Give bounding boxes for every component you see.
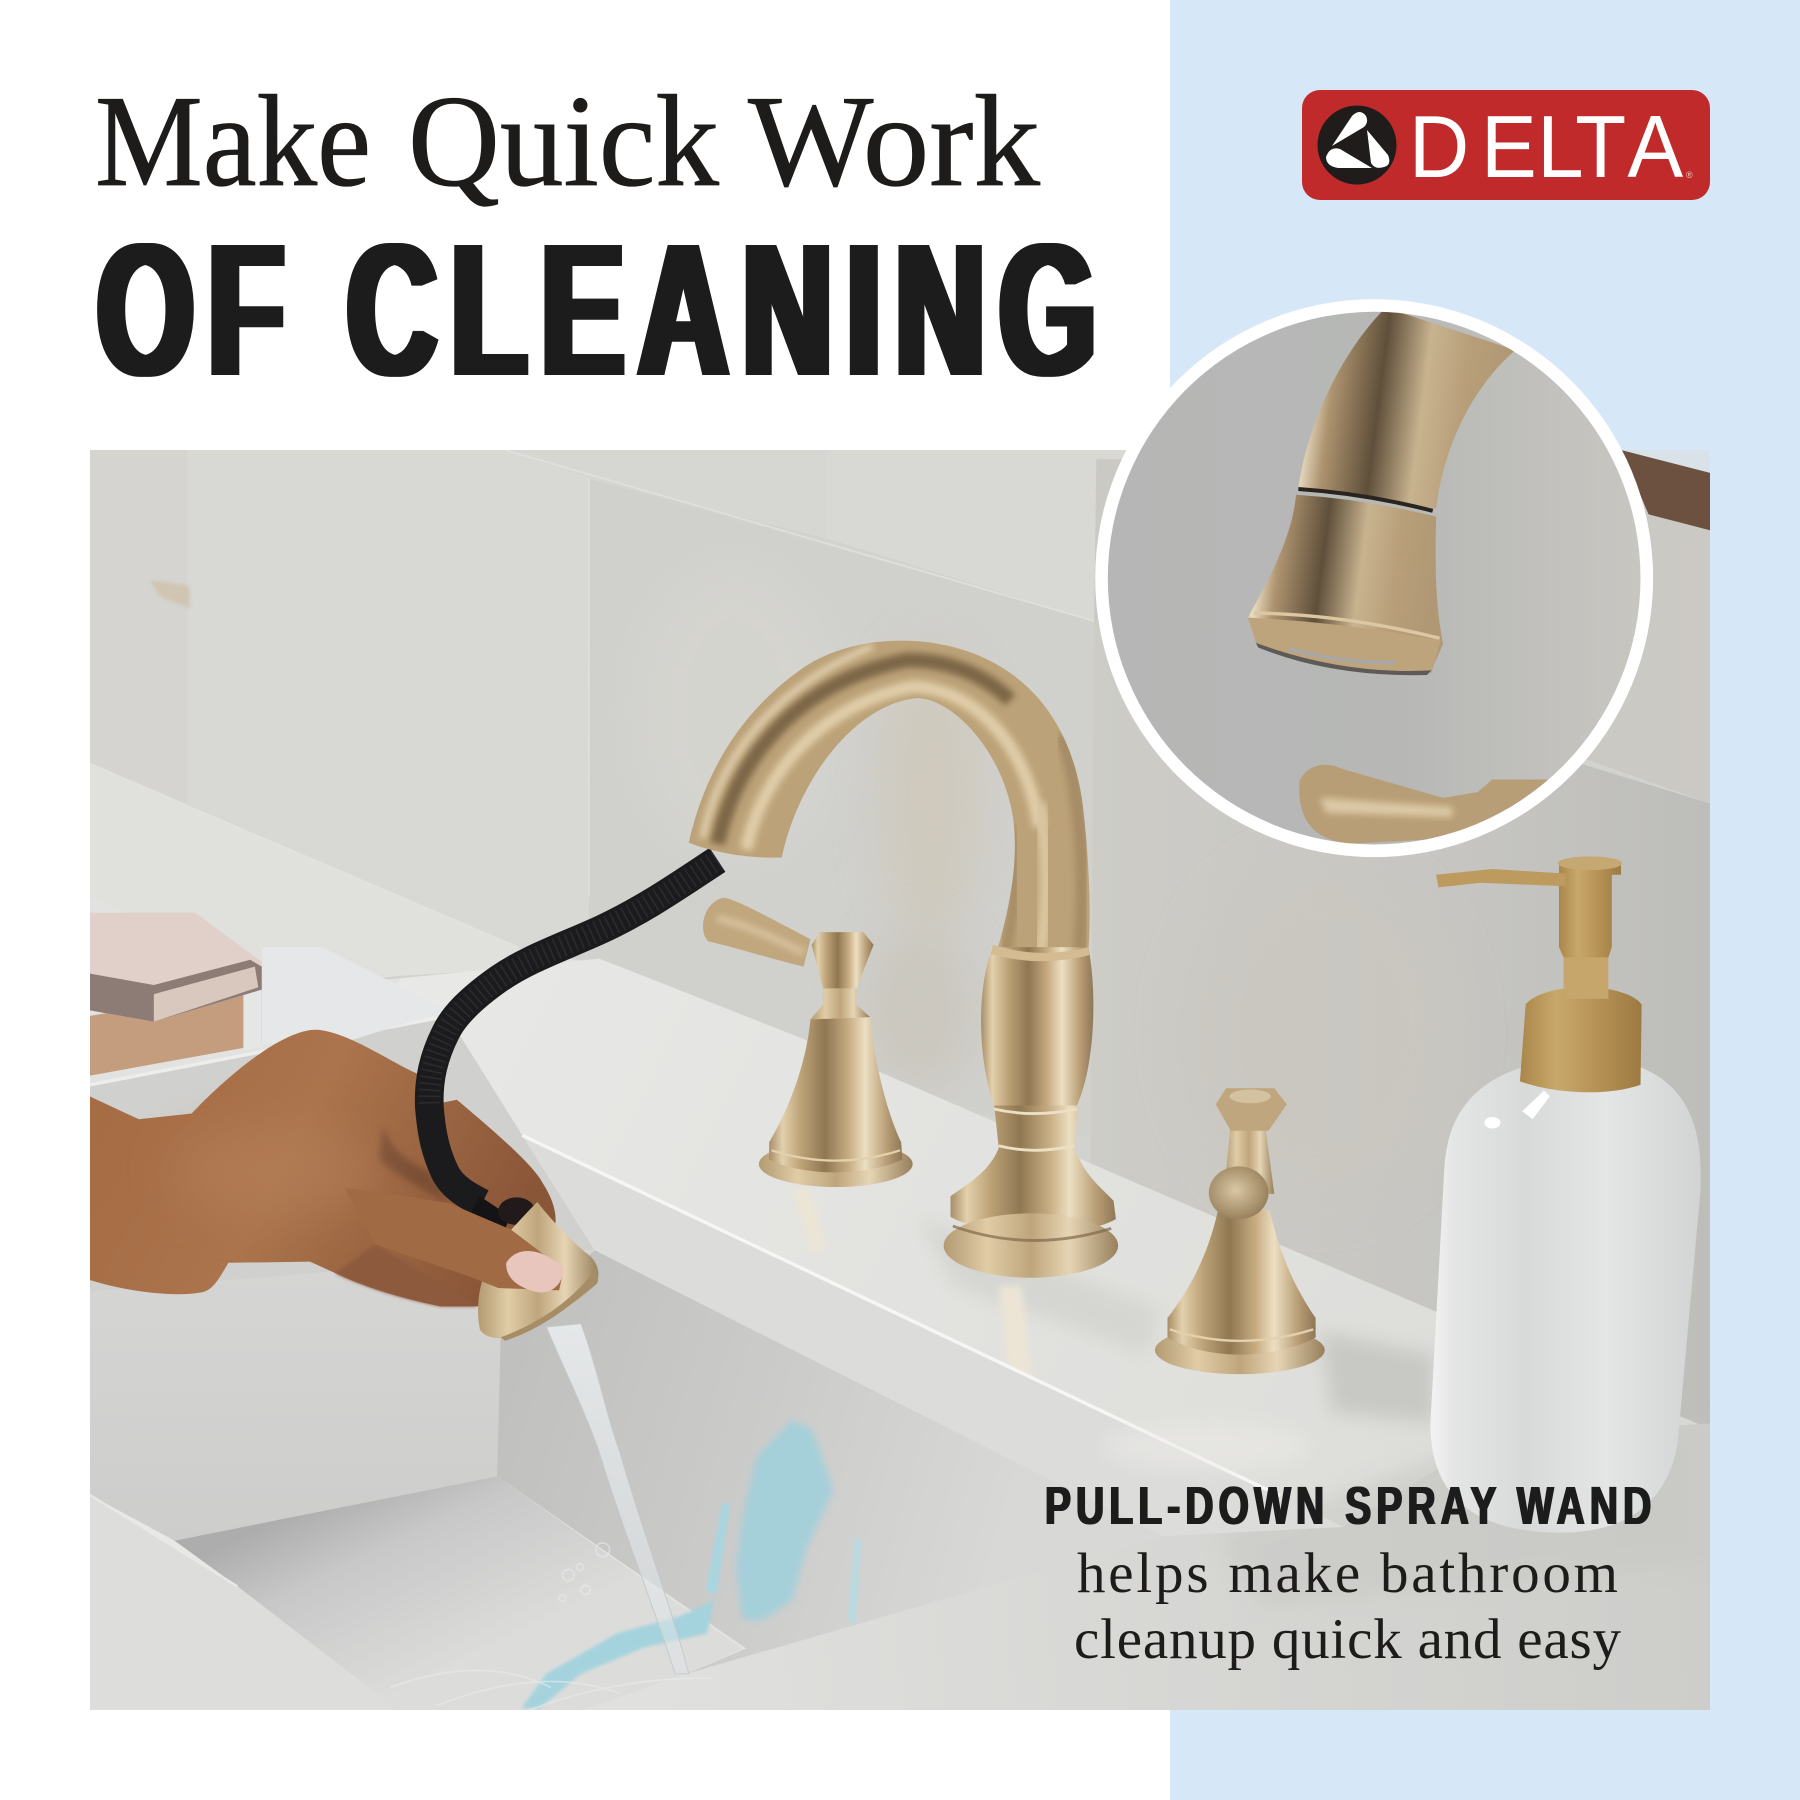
inset aerator [1256,643,1432,675]
callout line two: cleanup quick and easy [1074,1608,1622,1671]
bottle highlights [1484,1091,1550,1128]
faucet base [951,1106,1116,1234]
mirror edge [1621,450,1711,530]
title line: bold condensed: OF CLEANING [97,204,1096,415]
left handle [703,898,913,1187]
hose [429,860,718,1238]
sink back wall [90,1272,500,1540]
main faucet [689,641,1118,1278]
hand [90,1030,574,1309]
sink floor [174,1476,635,1710]
title line: serif [95,69,1041,214]
panel: bathroom photo scene [90,450,1711,1711]
marble tiles [90,450,1711,1429]
logo emblem [1318,106,1396,184]
spout [689,641,1090,959]
pump collar [1520,987,1642,1092]
soft shadows on counter [792,1188,1711,1607]
cleanser smear in sink [521,1420,861,1708]
water stream [546,1324,689,1674]
soap dispenser [1430,856,1701,1533]
title: make quick work of cleaning [95,69,1096,415]
inset ring [1298,489,1433,511]
sink basin [90,1016,1343,1711]
inset circle: spout closeup [1095,299,1653,857]
pump spout [1436,869,1566,887]
makeup jar [90,913,448,1076]
wall base [90,450,1710,1164]
bottle [1430,1068,1701,1533]
title line: serif: Quick [408,69,719,214]
inset spray head [1248,495,1443,673]
faucet neck rings [994,1109,1077,1150]
pump stem [1564,953,1608,999]
countertop [90,959,1711,1711]
white background [0,0,1170,1800]
faucet collar [991,945,1089,961]
inset white border [1095,299,1653,857]
logo: delta [1302,90,1710,200]
callout line one: helps make bathroom [1077,1542,1618,1605]
faucet foot [944,1213,1118,1278]
registered mark: ® [1686,170,1693,180]
panel reflection on countertop [1102,1421,1309,1472]
right handle [1155,1088,1325,1374]
counter right lower surface [1120,1424,1710,1710]
basin upper wall [352,1020,594,1251]
thumb and nail [344,1188,564,1293]
light blue column [1170,0,1800,1800]
logo background [1302,90,1710,200]
callout heading: PULL-DOWN SPRAY WAND [1045,1475,1651,1535]
callout text [1045,1475,1651,1671]
inset rim [1248,618,1441,674]
inset wall [1108,312,1640,844]
title line: serif: Make [95,69,371,214]
sink right wall [497,1250,1064,1673]
logo wordmark: DELTA [1409,98,1684,196]
faucet body bulge [981,947,1093,1106]
sink left rim [90,1495,398,1711]
inset upper spout [1298,308,1515,509]
pump head [1559,863,1621,957]
title line: serif: Work [748,69,1041,214]
wand head [478,1197,598,1341]
water ripples and bubbles [390,1543,712,1711]
inset lever [1299,765,1550,844]
counter front band [522,1135,1343,1536]
